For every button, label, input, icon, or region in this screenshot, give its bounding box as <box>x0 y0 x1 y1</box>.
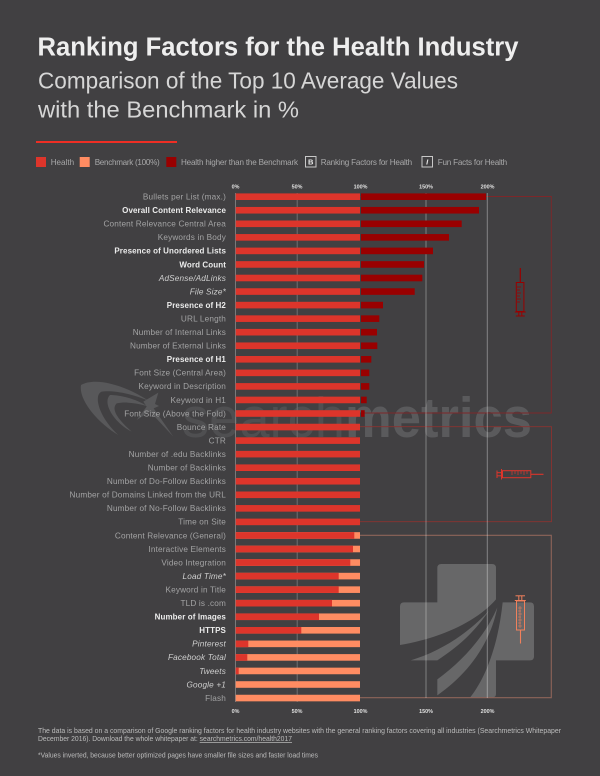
footnote: data source <box>38 726 562 743</box>
row: Time on Site: Time on Site <box>178 518 226 527</box>
legend: Benchmark (100%) <box>95 158 160 167</box>
row: CTR <box>209 436 360 445</box>
row: URL Length: URL Length <box>181 314 226 323</box>
legend: Health higher than the Benchmark <box>181 158 299 167</box>
row: Number of External Links <box>130 342 377 351</box>
row: Number of .edu Backlinks: Number of .edu Backlinks <box>129 450 226 459</box>
row: Time on Site <box>178 518 360 527</box>
subtitle: Comparison of the Top 10 Average Values <box>38 67 458 93</box>
row: Facebook Total <box>168 653 360 662</box>
axis labels bottom: 50% <box>292 709 303 715</box>
row: AdSense/AdLinks <box>158 274 422 283</box>
row: Number of No-Follow Backlinks <box>107 504 360 513</box>
legend: B <box>308 158 314 167</box>
row: HTTPS: HTTPS <box>199 626 227 635</box>
row: Number of Internal Links <box>133 328 377 337</box>
row: Presence of H2: Presence of H2 <box>167 301 226 310</box>
bar chart <box>70 192 486 703</box>
row: TLD is .com <box>180 599 360 608</box>
grid lines <box>236 193 487 702</box>
row: Keywords in Body: Keywords in Body <box>158 233 227 242</box>
row: Number of Do-Follow Backlinks <box>107 477 360 486</box>
axis labels bottom <box>232 709 495 715</box>
row: Keywords in Body <box>158 233 449 242</box>
legend: Fun Facts for Health <box>438 158 507 167</box>
legend: I <box>426 158 429 167</box>
highlighted box: below benchmark <box>360 535 551 698</box>
row: Font Size (Central Area) <box>134 369 369 378</box>
axis labels top: 50% <box>292 185 303 191</box>
icon: red syringe <box>497 469 544 480</box>
axis labels bottom: 100% <box>354 709 368 715</box>
footnote: data source: The data is based on a comparison of Google ranking factors for health industry websites with the general ranking factors covering all industries (Searchmetrics Whitepaper <box>38 726 562 735</box>
highlighted box: above benchmark <box>360 196 551 413</box>
row: Keyword in Title <box>165 585 360 594</box>
row: File Size: File Size* <box>190 287 227 296</box>
row: Load Time <box>182 572 360 581</box>
highlighted box: equal to benchmark <box>360 427 552 522</box>
row: Keyword in H1 <box>171 396 367 405</box>
row: Interactive Elements: Interactive Elements <box>148 545 226 554</box>
axis labels bottom: 150% <box>419 709 433 715</box>
row: Tweets <box>199 667 360 676</box>
footnote: data source: December 2016). Download the whole whitepaper at: searchmetrics.com/health2017 <box>38 734 292 743</box>
row: Keyword in H1: Keyword in H1 <box>171 396 226 405</box>
row: Keyword in Title: Keyword in Title <box>165 585 226 594</box>
icon: salmon syringe <box>515 596 526 644</box>
row: Flash: Flash <box>205 694 226 703</box>
axis labels bottom: 0% <box>232 709 240 715</box>
row: Overall Content Relevance <box>122 206 479 215</box>
row: Presence of Unordered Lists <box>114 247 433 256</box>
row: TLD is .com: TLD is .com <box>180 599 226 608</box>
axis labels top: 150% <box>419 185 433 191</box>
row: Font Size (Central Area): Font Size (Central Area) <box>134 369 226 378</box>
axis labels top <box>232 185 495 191</box>
row: Bounce Rate <box>177 423 360 432</box>
icon: dark red syringe <box>515 268 526 316</box>
row: Word Count <box>179 260 424 269</box>
row: Font Size (Above the Fold) <box>124 409 365 418</box>
row: Font Size (Above the Fold): Font Size (Above the Fold) <box>124 409 226 418</box>
row: Facebook Total: Facebook Total <box>168 653 226 662</box>
footnote: inverted values: *Values inverted, because better optimized pages have smaller file sizes and faster load times <box>38 750 318 760</box>
row: Number of Domains Linked from the URL: Number of Domains Linked from the URL <box>70 491 226 500</box>
row: Number of Do-Follow Backlinks: Number of Do-Follow Backlinks <box>107 477 226 486</box>
row: Presence of H2 <box>167 301 383 310</box>
row: Tweets: Tweets <box>199 667 226 676</box>
row: HTTPS <box>199 626 360 635</box>
title: Ranking Factors for the Health Industry <box>38 34 519 62</box>
row: Google +1: Google +1 <box>186 680 226 689</box>
row: Content Relevance Central Area: Content Relevance Central Area <box>103 220 226 229</box>
row: Bullets per List <box>143 192 486 202</box>
row: Load Time: Load Time* <box>182 572 227 581</box>
row: Content Relevance (General) <box>115 531 360 540</box>
row: Interactive Elements <box>148 545 360 554</box>
background cross logo <box>400 564 534 698</box>
row: Keyword in Description <box>139 382 369 391</box>
legend: Health <box>51 158 74 167</box>
watermark: searchmetrics logo: metrics <box>345 386 532 450</box>
row: Content Relevance Central Area <box>103 220 462 229</box>
row: Keyword in Description: Keyword in Description <box>139 382 226 391</box>
row: Number of Images <box>155 613 360 622</box>
row: Number of Images: Number of Images <box>155 613 226 622</box>
row: Bullets per List: Bullets per List (max.) <box>143 192 226 201</box>
row: Presence of Unordered Lists: Presence of Unordered Lists <box>114 247 226 256</box>
title underline <box>36 141 177 143</box>
row: Word Count: Word Count <box>179 260 226 269</box>
row: Number of Backlinks: Number of Backlinks <box>148 464 226 473</box>
row: Google +1 <box>186 680 360 689</box>
subtitle: with the Benchmark in % <box>37 96 299 122</box>
row: File Size <box>190 287 415 296</box>
legend <box>36 156 507 167</box>
row: Presence of H1: Presence of H1 <box>167 355 226 364</box>
axis labels top: 100% <box>354 185 368 191</box>
row: Bounce Rate: Bounce Rate <box>177 423 226 432</box>
row: Video Integration: Video Integration <box>161 558 226 567</box>
row: Video Integration <box>161 558 360 567</box>
watermark: searchmetrics logo: search <box>182 386 345 450</box>
row: Number of Backlinks <box>148 464 360 472</box>
axis labels top: 0% <box>232 185 240 191</box>
row: Overall Content Relevance: Overall Content Relevance <box>122 206 226 215</box>
row: Flash <box>205 694 360 703</box>
row: Pinterest: Pinterest <box>192 640 227 649</box>
row: Number of No-Follow Backlinks: Number of No-Follow Backlinks <box>107 504 226 513</box>
watermark: searchmetrics logo <box>81 382 532 450</box>
subtitle <box>37 67 458 122</box>
row: Presence of H1 <box>167 355 371 364</box>
row: Number of .edu Backlinks <box>129 450 360 459</box>
row: CTR: CTR <box>209 436 226 445</box>
legend: Ranking Factors for Health <box>321 158 412 167</box>
row: AdSense/AdLinks: AdSense/AdLinks <box>158 274 226 283</box>
axis labels bottom: 200% <box>481 709 495 715</box>
row: Number of External Links: Number of External Links <box>130 342 226 351</box>
axis labels top: 200% <box>481 185 495 191</box>
row: URL Length <box>181 314 379 323</box>
row: Number of Internal Links: Number of Internal Links <box>133 328 226 337</box>
row: Number of Domains Linked from the URL <box>70 491 360 500</box>
row: Content Relevance (General): Content Relevance (General) <box>115 531 226 540</box>
row: Pinterest <box>192 640 360 649</box>
